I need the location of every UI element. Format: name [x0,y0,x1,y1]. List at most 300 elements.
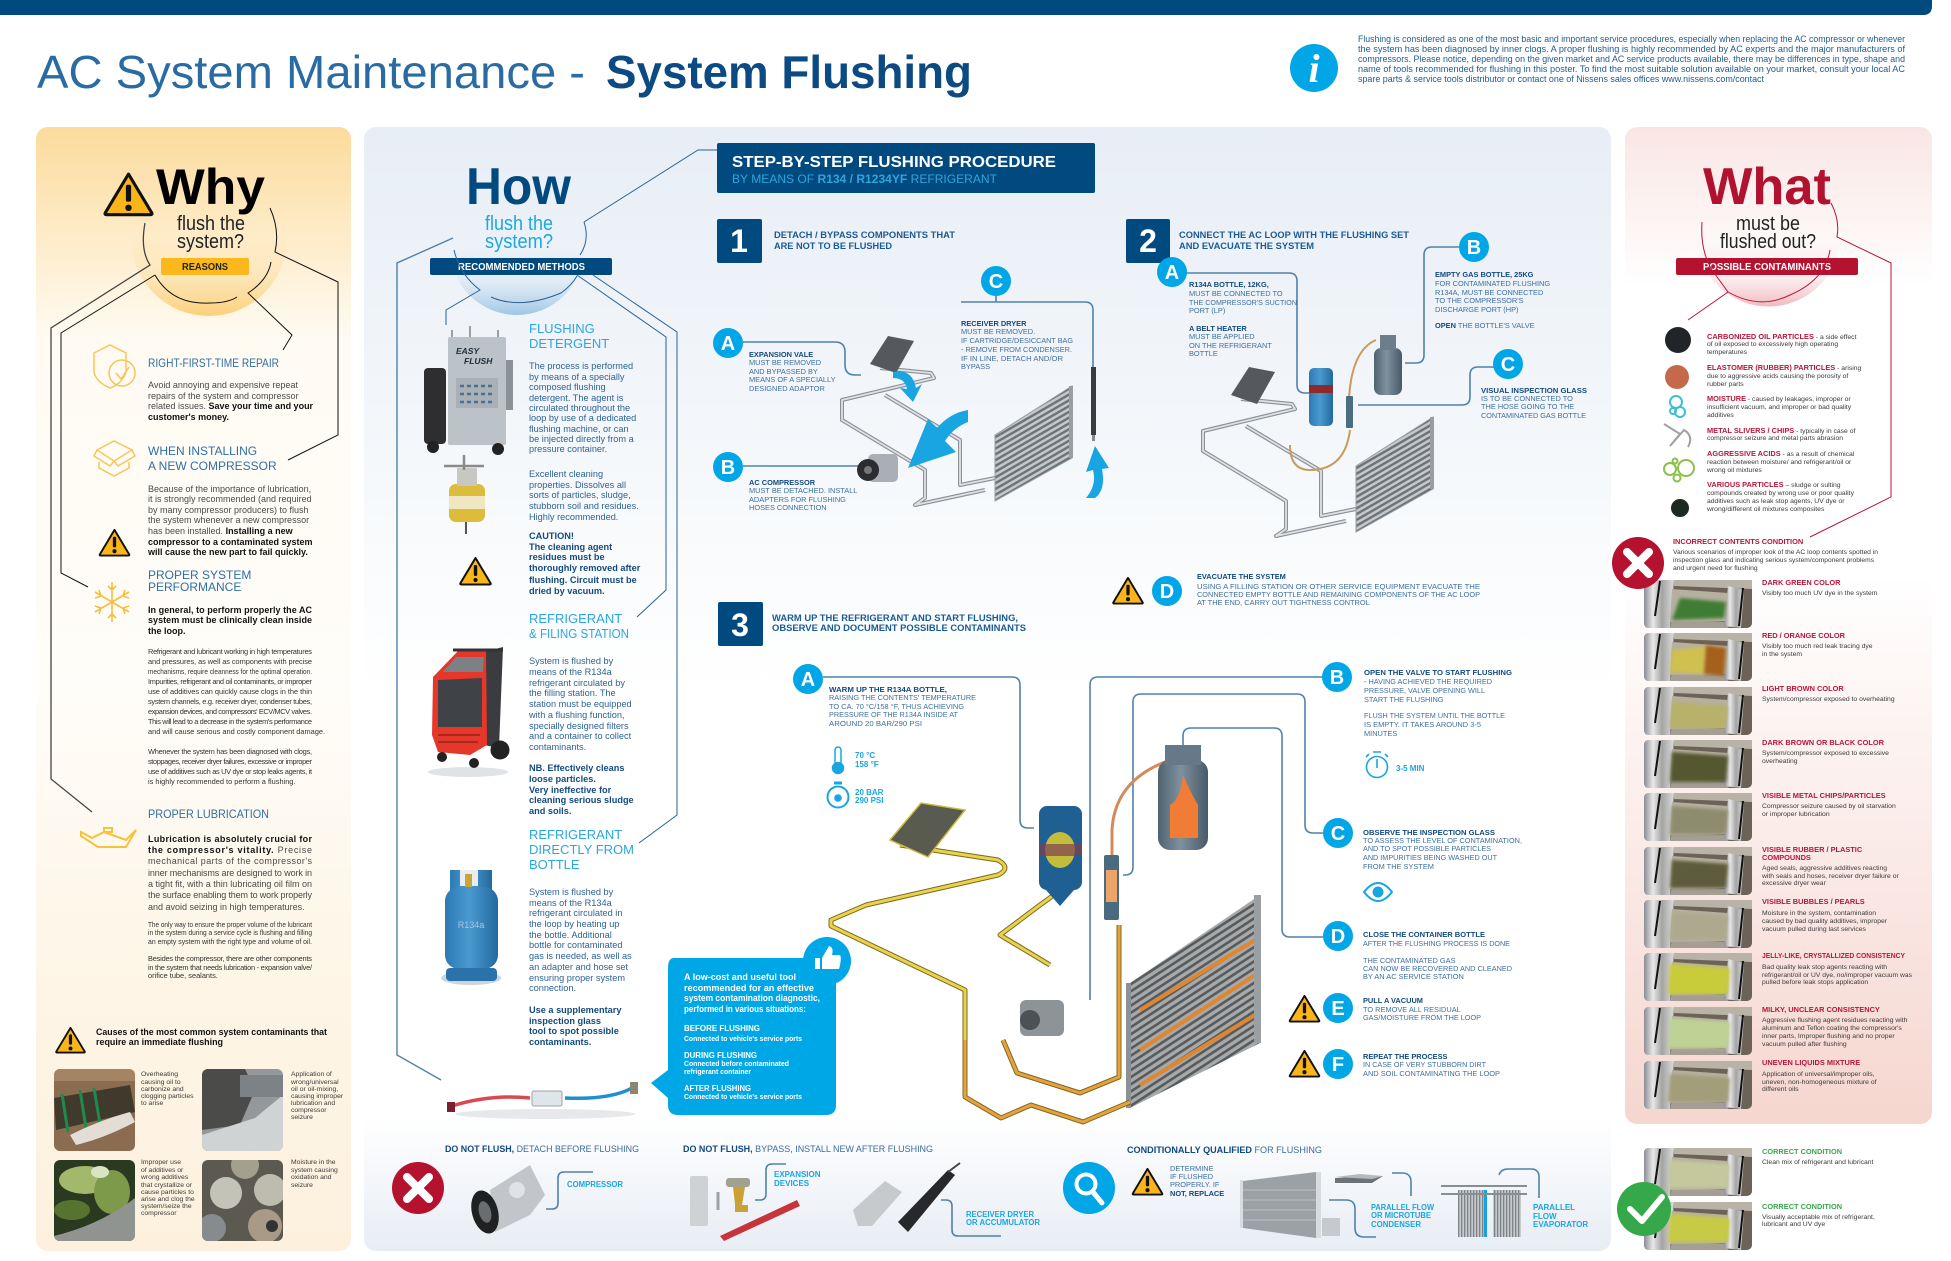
proper system performance [95,568,325,786]
causes heading [56,1027,327,1053]
text C: VISUAL INSPECTION GLASS [1481,386,1587,395]
row: rubber: excessive dryer wear [1762,880,1827,887]
connectors [743,296,1093,466]
how circle [450,248,584,315]
caption: compressor [291,1107,327,1114]
step 1 heading: 1 [730,223,748,259]
when installing a new compressor: the system whenever a new compressor [148,515,309,525]
method: refrigerant and filing station: station must be equipped [529,699,632,709]
icon: inspection glass [1104,855,1119,920]
contaminant list: ELASTOMER (RUBBER) PARTICLES - arising [1707,363,1862,372]
row: bubbles [1644,897,1888,948]
label: condenser: OR MICROTUBE [1371,1211,1432,1220]
title: System Flushing [606,46,972,98]
text A: THE COMPRESSOR'S SUCTION [1189,298,1297,307]
step 3 heading [718,602,1027,646]
callout: system contamination diagnostic, [684,993,820,1003]
row: jelly: Bad quality leak stop agents reacting with [1762,964,1887,971]
photo: moisture [202,1160,283,1241]
bottom row: do not flush, conditional [392,1144,1588,1241]
text: determine: IF FLUSHED [1170,1172,1213,1181]
proper system performance: Impurities, refrigerant and oil contaminants, or improper [148,677,313,686]
text E: TO REMOVE ALL RESIDUAL [1363,1005,1461,1014]
step 2 heading: AND EVACUATE THE SYSTEM [1179,241,1314,252]
caption: seizure [291,1114,313,1121]
reasons pill: REASONS [182,261,228,273]
row: milky: vacuum pulled after flushing [1762,1041,1847,1048]
text A: R134A BOTTLE, 12KG, [1189,280,1269,289]
text C: RECEIVER DRYER [961,319,1027,328]
procedure banner: STEP-BY-STEP FLUSHING PROCEDURE [732,154,1056,171]
method: refrigerant from bottle: ensuring proper system [529,973,625,983]
intro text [1358,33,1905,84]
what heading: flushed out? [1720,231,1816,253]
method: refrigerant and filing station: Very ineffective for [529,785,612,795]
text D: CLOSE THE CONTAINER BOTTLE [1363,930,1485,939]
method: flushing detergent: DETERGENT [529,336,609,351]
method: flushing detergent: properties. Dissolves all [529,480,626,490]
contaminant list [1664,327,1862,517]
text: determine: DETERMINE [1170,1164,1214,1173]
caption: oxidation and [291,1174,332,1181]
photo: overheating [54,1069,135,1151]
method: flushing detergent: Highly recommended. [529,512,618,522]
text D: EVACUATE THE SYSTEM [1197,572,1286,581]
method: flushing detergent: The cleaning agent [529,542,612,552]
badge C [1493,349,1523,379]
text B: HOSES CONNECTION [749,503,827,512]
proper system performance: is highly recommended to perform a flushing. [148,777,295,786]
text C: FROM THE SYSTEM [1363,862,1434,871]
text F [1363,1052,1500,1078]
method: refrigerant from bottle: refrigerant circulated in [529,908,622,918]
proper lubrication: an empty system with the right type and volume of oil. [148,937,312,946]
connector lines [397,150,717,1080]
text C: MUST BE REMOVED. [961,327,1035,336]
row: milky: MILKY, UNCLEAR CONSISTENCY [1762,1005,1880,1014]
row: correct 2: lubricant and UV dye [1762,1221,1825,1228]
row: dark green: Visibly too much UV dye in the system [1762,590,1878,597]
text B: MUST BE DETACHED. INSTALL [749,486,857,495]
intro text: Flushing is considered as one of the most basic and important service procedures, especially when replacing the AC compressor or whenever [1358,33,1905,44]
proper system performance: system channels, e.g. receiver dryer, condenser tubes, [148,697,312,706]
row: dark brown: DARK BROWN OR BLACK COLOR [1762,738,1885,747]
how heading: flush the [485,213,553,235]
row: red orange: in the system [1762,651,1802,658]
method: flushing detergent: thoroughly removed after [529,563,641,573]
text A: PRESSURE OF THE R134A INSIDE AT [829,710,958,719]
text A: A BELT HEATER [1189,324,1247,333]
hose [1290,340,1376,470]
method: refrigerant and filing station: & FILING STATION [529,626,629,641]
panel: why [36,127,351,1251]
text B: DISCHARGE PORT (HP) [1435,305,1518,314]
panel: what [1612,127,1932,1124]
contaminant list: MOISTURE - caused by leakages, improper or [1707,394,1851,403]
text C: - REMOVE FROM CONDENSER. [961,345,1072,354]
proper system performance: and will cause serious and costly component damage. [148,727,325,736]
intro text: spare parts & service tools distributor or contact one of Nissens sales offices www.nissens.com/contact [1358,73,1764,84]
caption [140,1159,195,1217]
text B: MINUTES [1364,729,1397,738]
text B: - HAVING ACHIEVED THE REQUIRED [1364,677,1492,686]
method: refrigerant and filing station: cleaning serious sludge [529,795,634,805]
row: light brown: LIGHT BROWN COLOR [1762,684,1844,693]
icon: blue bottle [441,870,501,985]
badge B [1322,662,1352,692]
text A: TO CA. 70 °C/158 °F, THUS ACHIEVING [829,702,964,711]
arrows [893,371,1109,498]
intro text: name of tools recommended for flushing in this poster. To find the most suitable solution available on your market, consult your local AC [1358,63,1905,74]
row: jelly: refrigerant/oil or UV dye, no/improper vacuum was [1762,972,1913,979]
badge B [713,452,743,482]
caption: cause particles to [141,1189,194,1196]
when installing a new compressor: will cause the new part to fail quickly. [147,547,308,557]
row: dark brown: overheating [1762,758,1798,765]
proper system performance: the loop. [148,626,186,636]
icon: info: i [1308,46,1320,91]
callout: performed in various situations: [684,1004,806,1014]
row: uneven: different oils [1762,1086,1799,1093]
text D: CAN NOW BE RECOVERED AND CLEANED [1363,964,1512,973]
badge C [1323,818,1353,848]
label: evaporator: PARALLEL [1533,1203,1575,1212]
icon: microtube [1335,1174,1383,1183]
badge D [1323,921,1353,951]
text B: OPEN THE BOTTLE'S VALVE [1435,321,1535,330]
icon: green check [1617,1182,1671,1236]
method: refrigerant and filing station: refrigerant circulated by [529,678,625,688]
label: condenser: PARALLEL FLOW [1371,1203,1434,1212]
proper system performance: This will lead to a decrease in the system's performance [148,717,312,726]
caption: oil or oil-mixing, [291,1086,338,1093]
row: red orange: RED / ORANGE COLOR [1762,631,1846,640]
text B: ADAPTERS FOR FLUSHING [749,495,846,504]
callout: BEFORE FLUSHING [684,1024,760,1033]
caption: that crystallize or [141,1182,193,1189]
label: expansion devices [755,1164,821,1200]
badge A: A [1165,262,1179,284]
text A: ON THE REFRIGERANT [1189,341,1272,350]
text E [1363,996,1481,1022]
icon: receiver dryer [1091,367,1096,441]
text A [749,350,836,393]
badge B: B [721,457,735,479]
top bar [0,0,1932,15]
icon: inspection glass [1346,396,1353,428]
row: correct 1: CORRECT CONDITION [1762,1147,1842,1156]
row: milky: aluminum and Teflon coating the compressor's [1762,1025,1902,1032]
right-first-time repair: Avoid annoying and expensive repeat [148,380,298,390]
callout: recommended for an effective [684,983,814,993]
warning and badge D: D [1160,581,1174,603]
icon: flushing machine [424,326,513,455]
text C: BYPASS [961,362,990,371]
icon: carbon [1665,327,1691,353]
icon: condenser [1240,1172,1340,1238]
label: evaporator [1499,1169,1588,1229]
what heading [1703,158,1831,253]
icon: shield [94,345,135,388]
right-first-time repair: RIGHT-FIRST-TIME REPAIR [148,356,279,370]
method: refrigerant from bottle: the bottle. Additional [529,930,612,940]
badge D: D [1331,926,1345,948]
title [37,46,972,98]
contaminant list: CARBONIZED OIL PARTICLES - a side effect [1707,332,1857,341]
intro text: the system has been diagnosed by inner clogs. A proper flushing is highly recommended by AC experts and the major manufacturers of [1358,43,1905,54]
text A: WARM UP THE R134A BOTTLE, [829,685,947,694]
row: uneven [1644,1058,1877,1109]
row: bubbles: caused by bad quality additives, improper [1762,918,1888,925]
text A: BOTTLE [1189,349,1218,358]
contaminant list: of oil exposed to excessively high operating [1707,341,1838,348]
method: refrigerant from bottle: REFRIGERANT [529,827,622,842]
row: metal chips: VISIBLE METAL CHIPS/PARTICLES [1762,791,1886,800]
method: refrigerant and filing station: means of the R134a [529,667,613,677]
text B: OPEN THE VALVE TO START FLUSHING [1364,668,1512,677]
method: flushing detergent: circulated throughout the [529,403,630,413]
icon: blue bottle [1309,368,1333,426]
right-first-time repair: related issues. Save your time and your [148,401,314,411]
badge A [713,328,743,358]
row: metal chips: Compressor seizure caused by oil starvation [1762,803,1896,810]
panel: how [364,127,1611,1251]
incorrect condition heading: Various scenarios of improper look of the AC loop contents spotted in [1673,549,1878,556]
text B [1435,270,1550,330]
icon: timer [1366,752,1388,778]
method: refrigerant from bottle: BOTTLE [529,857,580,872]
contaminant list: rubber parts [1707,381,1744,388]
incorrect condition heading: and urgent need for flushing [1673,565,1758,572]
text: determine [1170,1164,1224,1198]
text C [961,319,1073,371]
callout: DURING FLUSHING [684,1051,757,1060]
row: dark brown: System/compressor exposed to excessive [1762,750,1889,757]
procedure banner [717,143,1095,193]
method: flushing detergent: be injected directly from a [529,434,635,444]
proper system performance: PROPER SYSTEM [148,568,251,582]
method: refrigerant and filing station: loose particles. [529,774,596,784]
label: receiver dryer: RECEIVER DRYER [966,1210,1034,1219]
badge C: C [1331,823,1345,845]
icon: receiver dryer [853,1163,960,1232]
icon: warning [460,558,491,584]
how heading: How [466,158,572,216]
callout: A low-cost and useful tool [684,972,796,982]
method: flushing detergent: composed flushing [529,382,606,392]
method: refrigerant and filing station: with a flushing function, [528,710,625,720]
right-first-time repair: customer's money. [148,412,229,422]
row: jelly: JELLY-LIKE, CRYSTALLIZED CONSISTENCY [1762,951,1905,960]
method: refrigerant and filing station: REFRIGERANT [529,611,622,626]
label: receiver dryer [941,1200,1040,1236]
why heading [105,159,265,253]
warning and badge F [1290,1049,1353,1079]
text A: PORT (LP) [1189,306,1225,315]
icon: flushing machine: FLUSH [464,356,493,366]
proper lubrication: mechanical parts of the compressor's [148,856,312,866]
contaminant list: VARIOUS PARTICLES – sludge or sulting [1707,480,1841,489]
method: flushing detergent: loop by use of a dedicated [529,413,636,423]
caption [141,1071,194,1107]
proper lubrication: Besides the compressor, there are other components [148,954,312,963]
text C: THE HOSE GOING TO THE [1481,402,1574,411]
icon: red x [1612,537,1664,589]
icon: flushing machine: EASY [456,346,480,356]
method: refrigerant from bottle: inspection glass [529,1016,601,1026]
text B: START THE FLUSHING [1364,695,1444,704]
icon: snowflake [95,582,129,622]
procedure banner: BY MEANS OF R134 / R1234YF REFRIGERANT [732,172,998,186]
proper lubrication: a tight fit, with a thin lubricating oil film on [148,879,312,889]
reasons pill [161,258,249,275]
callout: Connected to vehicle's service ports [684,1092,802,1101]
text D: AFTER THE FLUSHING PROCESS IS DONE [1363,939,1510,948]
step 3 heading: OBSERVE AND DOCUMENT POSSIBLE CONTAMINANTS [772,623,1027,634]
caption: Overheating [141,1071,178,1078]
method: refrigerant from bottle: tool to spot possible [529,1026,619,1036]
row: light brown [1644,684,1895,735]
text B: PRESSURE, VALVE OPENING WILL [1364,686,1485,695]
method: refrigerant from bottle: gas is needed, as well as [529,951,632,961]
contaminants pill [1676,258,1858,275]
photo: wrong oil [202,1069,283,1151]
causes heading: require an immediate flushing [96,1037,223,1047]
photo: additives [54,1160,135,1241]
label: condenser: CONDENSER [1371,1220,1421,1229]
callout: refrigerant container [684,1067,751,1076]
text B [749,478,857,512]
callout: Connected before contaminated [684,1059,789,1068]
method: refrigerant from bottle: the loop by heating up [529,919,619,929]
icon: info [1290,44,1338,92]
row: metal chips [1644,791,1896,841]
method: flushing detergent: Excellent cleaning [529,469,603,479]
text B: R134A, MUST BE CONNECTED [1435,288,1543,297]
text A: MUST BE APPLIED [1189,332,1255,341]
text C: IS TO BE CONNECTED TO [1481,394,1573,403]
contaminant list: METAL SLIVERS / CHIPS - typically in case of [1707,426,1856,435]
method: refrigerant from bottle: an adapter and hose set [529,962,629,972]
badge A [1157,257,1187,287]
row: dark green [1644,578,1878,628]
contaminant list: compounds created by wrong use or poor quality [1707,490,1855,497]
when installing a new compressor: has been installed. Installing a new [148,526,294,536]
step 3 heading: 3 [731,607,749,643]
icon: evaporator [1441,1186,1527,1237]
caption: compressor [141,1210,177,1217]
method: refrigerant from bottle: System is flushed by [529,887,614,897]
heading: do not flush compressor: DO NOT FLUSH, DETACH BEFORE FLUSHING [445,1144,639,1155]
row: uneven: Application of universal/improper oils, [1762,1071,1875,1078]
duration: 3-5 MIN [1396,764,1425,773]
what circle [1697,243,1840,307]
proper lubrication: PROPER LUBRICATION [148,807,269,821]
badge B [1459,232,1489,262]
text A: RAISING THE CONTENTS' TEMPERATURE [829,693,976,702]
callout [651,937,851,1115]
text F: REPEAT THE PROCESS [1363,1052,1448,1061]
row: milky: Aggressive flushing agent residues reacting with [1762,1017,1908,1024]
caption: wrong additives [140,1174,189,1181]
label: expansion devices: EXPANSION [774,1170,821,1179]
text F: AND SOIL CONTAMINATING THE LOOP [1363,1069,1500,1078]
step 2 heading [1126,219,1409,263]
connector lines [51,208,338,812]
text F: IN CASE OF VERY STUBBORN DIRT [1363,1060,1486,1069]
row: correct 1 [1644,1147,1874,1196]
proper system performance: mechanisms, require cleanness for the optimal operation. [148,667,312,676]
step 3 [718,602,1522,1122]
icon: gas bottle with flame [1158,745,1208,850]
proper lubrication: and avoid seizing in high temperatures. [148,902,305,912]
row: bubbles: vacuum pulled during last services [1762,926,1866,933]
method: flushing detergent: pressure container. [529,444,607,454]
caption: carbonize and [141,1086,184,1093]
row: correct 2 [1644,1202,1875,1250]
icon: oil can [81,828,136,847]
step 2 heading: 2 [1139,223,1157,259]
row: dark green: DARK GREEN COLOR [1762,578,1841,587]
proper system performance: expansion devices, and compressors' ECV/MCV valves. [148,707,312,716]
label: evaporator: FLOW [1533,1212,1557,1221]
text A: DESIGNED ADAPTOR [749,384,825,393]
text: determine: NOT, REPLACE [1170,1189,1224,1198]
contaminant list: additives [1707,412,1734,419]
method: flushing detergent: stubborn soil and residues. [529,501,639,511]
callout: AFTER FLUSHING [684,1084,751,1093]
step 2 [1113,219,1587,607]
icon: moisture [1670,396,1685,417]
icon: compressor [467,1165,545,1237]
text B: TO THE COMPRESSOR'S [1435,296,1524,305]
text C [1363,828,1522,871]
caption: Application of [291,1071,332,1078]
text C: OBSERVE THE INSPECTION GLASS [1363,828,1495,837]
contaminants pill: POSSIBLE CONTAMINANTS [1703,261,1831,273]
icon: evaporator [890,803,965,857]
text D [1363,930,1512,981]
text A [1189,280,1297,358]
text B: IS EMPTY. IT TAKES AROUND 3-5 [1364,720,1481,729]
row: light brown: System/compressor exposed to overheating [1762,696,1895,703]
row: bubbles: VISIBLE BUBBLES / PEARLS [1762,897,1865,906]
icon: magnifier [1063,1162,1115,1214]
badge C [981,266,1011,296]
why heading: Why [156,159,265,215]
proper lubrication [81,807,313,980]
when installing a new compressor [94,441,313,557]
proper system performance: use of additives can quickly cause clogs in the thin [148,687,312,696]
text D [1197,572,1480,607]
step 1 heading [717,219,955,263]
recommended methods pill: RECOMMENDED METHODS [458,261,585,273]
row: rubber: VISIBLE RUBBER / PLASTIC [1762,845,1863,854]
text D: BY AN AC SERVICE STATION [1363,972,1464,981]
method: refrigerant from bottle: Use a supplementary [529,1005,622,1015]
text B: FOR CONTAMINATED FLUSHING [1435,279,1550,288]
method: flushing detergent: flushing machine, or can [529,424,629,434]
proper system performance: use of additives such as UV dye or stop leaks agents, it [148,767,312,776]
proper system performance: and pressures, as well as components with precise [148,657,312,666]
method: flushing detergent: sorts of particles, sludge, [529,490,631,500]
proper lubrication: inner mechanisms are designed to work in [148,868,312,878]
incorrect condition heading: inspection glass and indicating serious system/component problems [1673,557,1875,564]
method: refrigerant and filing station: contaminants. [529,742,586,752]
caption: Moisture in the [291,1159,336,1166]
diagram: flushing loop [831,757,1261,1122]
proper system performance: stoppages, receiver dryer failures, excessive or improper [148,757,313,766]
